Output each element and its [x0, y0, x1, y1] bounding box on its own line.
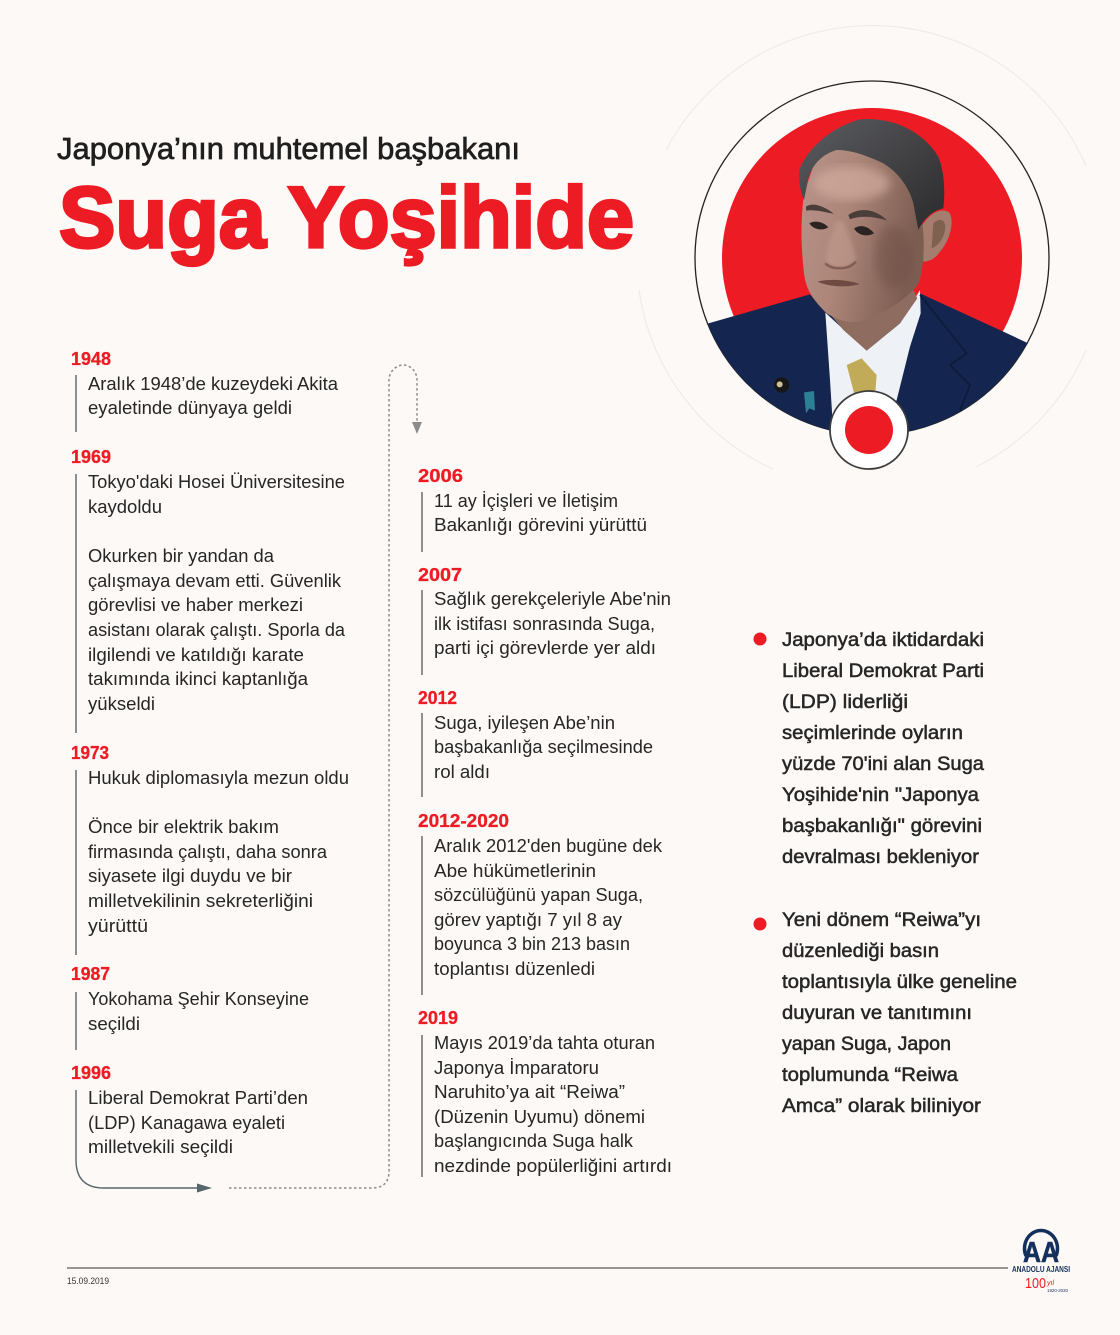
lapel edge	[920, 295, 970, 410]
entry 1973: yürüttü	[88, 915, 148, 936]
entry 2019: Japonya İmparatoru	[434, 1057, 599, 1078]
entry 2006: Bakanlığı görevini yürüttü	[434, 514, 647, 535]
entry 1969: yükseldi	[88, 693, 155, 714]
entry 2012-2020: görev yaptığı 7 yıl 8 ay	[434, 909, 623, 930]
logo: Anadolu Ajansı 100th year: yıl	[1046, 1280, 1054, 1287]
entry 1987	[71, 963, 309, 1050]
entry 1973: firmasında çalıştı, daha sonra	[88, 841, 328, 862]
nose	[826, 220, 856, 268]
decorative outer arcs	[639, 26, 1086, 469]
entry 1996: (LDP) Kanagawa eyaleti	[88, 1112, 285, 1133]
entry 1996	[71, 1062, 308, 1157]
key point 2	[754, 909, 1017, 1117]
small flag badge	[830, 391, 908, 469]
key point 2: toplumunda “Reiwa	[782, 1064, 958, 1086]
red sun disc	[722, 108, 1022, 408]
logo: Anadolu Ajansı 100th year: 100	[1025, 1275, 1046, 1292]
entry 2006: 11 ay İçişleri ve İletişim	[434, 490, 618, 511]
key point 1	[754, 629, 984, 868]
lapel pin	[774, 377, 789, 393]
ear	[922, 211, 952, 262]
entry 2012: başbakanlığa seçilmesinde	[434, 736, 653, 757]
entry 2012-2020: sözcülüğünü yapan Suga,	[434, 884, 643, 905]
key point 2: toplantısıyla ülke geneline	[782, 971, 1017, 993]
thin ring	[695, 81, 1049, 435]
key point 1: devralması bekleniyor	[782, 846, 980, 868]
entry 1973: Önce bir elektrik bakım	[88, 816, 279, 837]
footer rule and date: 15.09.2019	[67, 1276, 109, 1286]
entry 2006: 2006	[418, 465, 463, 486]
entry 1987: Yokohama Şehir Konseyine	[88, 988, 309, 1009]
entry 2007	[418, 564, 671, 675]
entry 2007: ilk istifası sonrasında Suga,	[434, 613, 655, 634]
entry 2012: Suga, iyileşen Abe’nin	[434, 712, 615, 733]
entry 2019: (Düzenin Uyumu) dönemi	[434, 1106, 645, 1127]
entry 2007: parti içi görevlerde yer aldı	[434, 637, 656, 658]
main title: Suga Yoşihide	[59, 170, 634, 266]
entry 1969: Tokyo'daki Hosei Üniversitesine	[88, 471, 345, 492]
key point 1: (LDP) liderliği	[782, 691, 908, 713]
logo: Anadolu Ajansı 100th year: 1920-2020	[1047, 1288, 1068, 1293]
entry 2019: 2019	[418, 1007, 458, 1028]
key point 1: yüzde 70'ini alan Suga	[782, 753, 984, 775]
entry 1969: 1969	[71, 446, 111, 467]
entry 2019	[418, 1007, 672, 1177]
entry 2007: Sağlık gerekçeleriyle Abe'nin	[434, 588, 671, 609]
key point 1: Liberal Demokrat Parti	[782, 660, 984, 682]
title block	[57, 131, 634, 266]
tie	[847, 358, 877, 397]
entry 1973: siyasete ilgi duydu ve bir	[88, 865, 292, 886]
key point 1: Japonya’da iktidardaki	[782, 629, 984, 651]
cheek shading	[875, 225, 912, 288]
entry 1973: Hukuk diplomasıyla mezun oldu	[88, 767, 349, 788]
entry 1973	[71, 742, 349, 955]
entry 1969: çalışmaya devam etti. Güvenlik	[88, 570, 342, 591]
entry 2012-2020: 2012-2020	[418, 810, 509, 831]
entry 2012: 2012	[418, 687, 457, 708]
entry 1969: Okurken bir yandan da	[88, 545, 275, 566]
subtitle: Japonya’nın muhtemel başbakanı	[57, 131, 520, 166]
entry 2012: rol aldı	[434, 761, 490, 782]
key point 1: başbakanlığı" görevini	[782, 815, 982, 837]
entry 1987: seçildi	[88, 1013, 140, 1034]
entry 1969: ilgilendi ve katıldığı karate	[88, 644, 304, 665]
entry 2019: başlangıcında Suga halk	[434, 1130, 634, 1151]
entry 1996: milletvekili seçildi	[88, 1136, 233, 1157]
portrait illustration	[693, 119, 1047, 493]
entry 1973: 1973	[71, 742, 109, 763]
eyes	[809, 222, 828, 229]
entry 1948: Aralık 1948’de kuzeydeki Akita	[88, 373, 339, 394]
middle timeline column	[418, 465, 672, 1177]
shirt	[825, 290, 921, 415]
entry 1969	[71, 446, 346, 733]
neck	[827, 290, 917, 351]
entry 1948: eyaletinde dünyaya geldi	[88, 397, 292, 418]
entry 2012-2020	[418, 810, 663, 995]
entry 1987: 1987	[71, 963, 110, 984]
entry 2019: nezdinde popülerliğini artırdı	[434, 1155, 672, 1176]
key point 1: Yoşihide'nin "Japonya	[782, 784, 979, 806]
blue ribbon	[804, 391, 815, 413]
timeline arrow: dotted connector	[229, 365, 422, 1188]
entry 1969: kaydoldu	[88, 496, 162, 517]
entry 2012-2020: Aralık 2012'den bugüne dek	[434, 835, 663, 856]
entry 1969: takımında ikinci kaptanlığa	[88, 668, 309, 689]
entry 1948	[71, 348, 339, 432]
entry 1969: görevlisi ve haber merkezi	[88, 594, 303, 615]
entry 2006	[418, 465, 647, 552]
left timeline column	[71, 348, 349, 1157]
key point 2: yapan Suga, Japon	[782, 1033, 951, 1055]
entry 2012	[418, 687, 653, 797]
suit	[708, 293, 1027, 431]
entry 2012-2020: boyunca 3 bin 213 basın	[434, 933, 630, 954]
key point 2: düzenlediği basın	[782, 940, 939, 962]
logo: Anadolu Ajansı 100th year: AA	[1023, 1237, 1059, 1269]
entry 1948: 1948	[71, 348, 111, 369]
entry 1996: 1996	[71, 1062, 111, 1083]
entry 2007: 2007	[418, 564, 462, 585]
portrait medallion	[639, 26, 1086, 493]
logo: Anadolu Ajansı 100th year	[1012, 1231, 1070, 1293]
key point 1: seçimlerinde oyların	[782, 722, 963, 744]
entry 1969: asistanı olarak çalıştı. Sporla da	[88, 619, 346, 640]
key point 2: duyuran ve tanıtımını	[782, 1002, 972, 1024]
entry 2019: Naruhito’ya ait “Reiwa”	[434, 1081, 625, 1102]
entry 2019: Mayıs 2019’da tahta oturan	[434, 1032, 655, 1053]
brows	[806, 205, 834, 214]
entry 2012-2020: toplantısı düzenledi	[434, 958, 595, 979]
face	[801, 140, 924, 322]
key point 2: Yeni dönem “Reiwa”yı	[782, 909, 981, 931]
mouth	[817, 280, 860, 286]
timeline arrow: solid part	[76, 1090, 212, 1192]
forehead highlight	[813, 167, 890, 200]
entry 1996: Liberal Demokrat Parti’den	[88, 1087, 308, 1108]
key point 2: Amca” olarak biliniyor	[782, 1095, 982, 1117]
hair	[799, 119, 944, 230]
entry 1973: milletvekilinin sekreterliğini	[88, 890, 313, 911]
logo: Anadolu Ajansı 100th year: ANADOLU AJANSI	[1012, 1264, 1070, 1274]
entry 2012-2020: Abe hükümetlerinin	[434, 860, 596, 881]
